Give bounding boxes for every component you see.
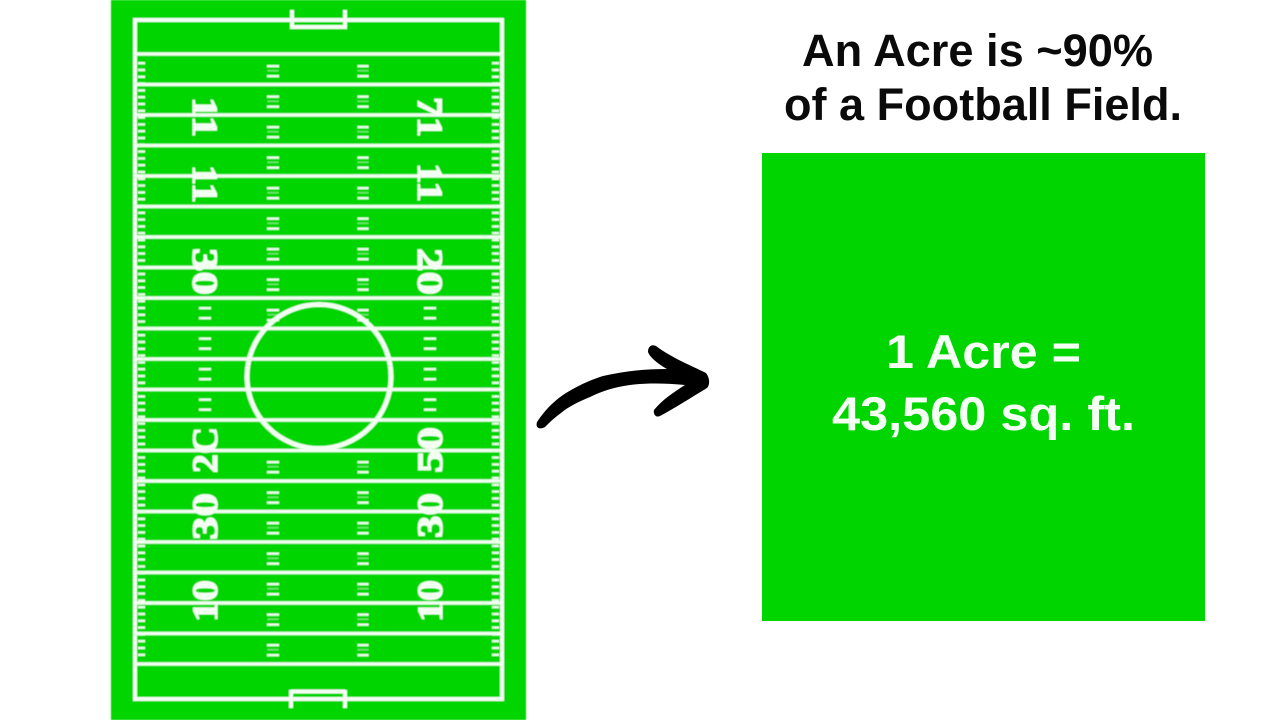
panel: one acre square xyxy=(762,153,1205,621)
left yard numbers: 10 xyxy=(185,580,225,622)
title: of a Football Field. xyxy=(784,79,1182,130)
left yard numbers: 30 xyxy=(185,248,225,295)
right yard numbers: 11 xyxy=(410,163,450,202)
left yard numbers: 2C xyxy=(185,427,225,473)
right yard numbers: 50 xyxy=(410,427,450,473)
top goal post xyxy=(292,10,345,29)
field turf xyxy=(111,0,526,720)
left sideline ticks xyxy=(138,62,145,660)
outer-right hash marks xyxy=(424,307,436,420)
panel: football field xyxy=(111,0,526,720)
right sideline ticks xyxy=(492,62,499,660)
outer-left hash marks xyxy=(199,307,211,420)
left yard numbers: 30 xyxy=(185,493,225,540)
right yard numbers: 71 xyxy=(410,97,450,137)
arrow xyxy=(537,345,709,428)
right yard numbers: 20 xyxy=(410,248,450,295)
green square xyxy=(762,153,1205,621)
sidelines and end lines xyxy=(135,20,502,699)
bottom goal post xyxy=(291,690,345,708)
acre label: 1 Acre = xyxy=(886,325,1081,378)
title xyxy=(784,25,1182,130)
left yard numbers: 11 xyxy=(185,97,225,137)
acre label xyxy=(832,325,1135,440)
title: An Acre is ~90% xyxy=(802,25,1153,76)
right yard numbers xyxy=(410,97,450,622)
center-left hash marks xyxy=(267,65,279,660)
center-right hash marks xyxy=(358,65,368,660)
right yard numbers: 10 xyxy=(410,580,450,622)
left yard numbers xyxy=(185,97,225,622)
faint center hash marks xyxy=(273,70,363,660)
center circle xyxy=(247,304,391,448)
left yard numbers: 11 xyxy=(185,165,225,203)
acre label: 43,560 sq. ft. xyxy=(832,387,1135,440)
yard lines xyxy=(135,54,502,664)
right yard numbers: 30 xyxy=(410,493,450,538)
